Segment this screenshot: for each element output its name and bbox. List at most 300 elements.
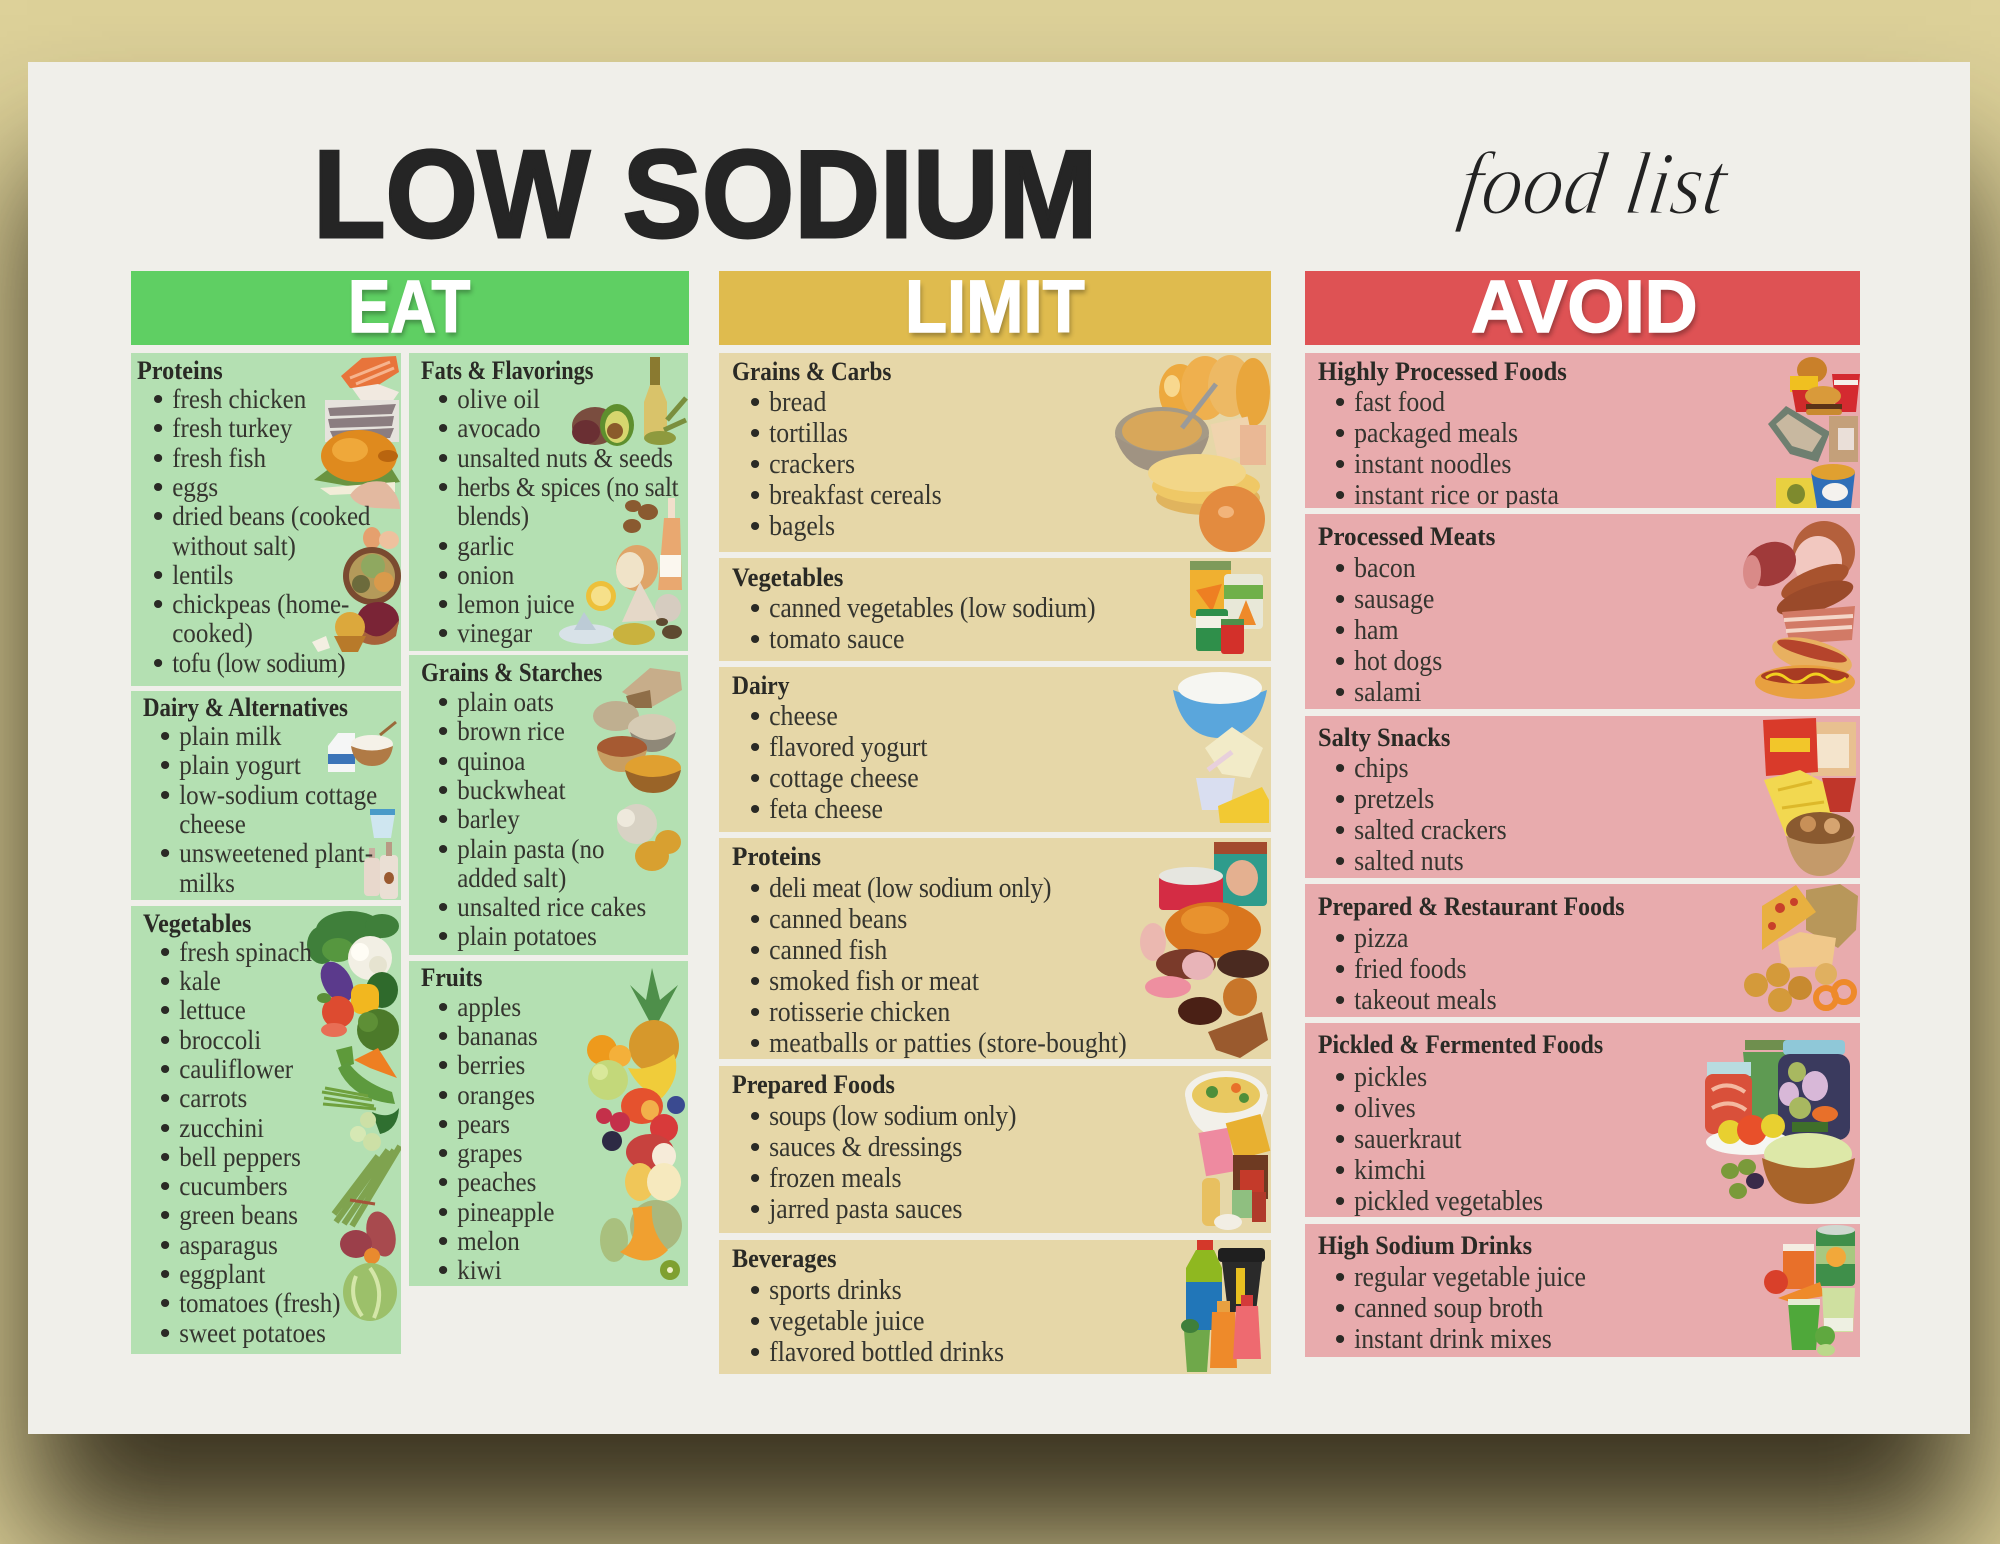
- icon: roast turkey: [314, 430, 400, 495]
- list: vegetables: [161, 936, 340, 1348]
- list: highly processed foods: instant noodles: [1354, 449, 1512, 480]
- icon: pasta bowl: [625, 755, 681, 793]
- icon: meal tray: [1768, 406, 1830, 462]
- icon: bacon: [1782, 606, 1855, 644]
- list: vegetables: tomatoes (fresh): [179, 1287, 340, 1318]
- icon: green jar: [1743, 1040, 1794, 1124]
- list: salty snacks: [1336, 753, 1507, 877]
- food illustrations: proteins: [1140, 842, 1269, 1058]
- icon: crackers: [1210, 416, 1266, 465]
- list: grains: unsalted rice cakes: [457, 891, 646, 922]
- icon: shaker: [1218, 1248, 1265, 1312]
- list: proteins: smoked fish or meat: [769, 966, 978, 996]
- icon: eggs: [363, 527, 399, 549]
- icon: grain sack: [622, 668, 682, 708]
- panel: avoid high sodium drinks: [1305, 1224, 1860, 1357]
- list: vegetables: [751, 592, 1095, 654]
- list: grains and carbs: [751, 387, 941, 542]
- icon: cauliflower: [348, 936, 392, 980]
- icon: eggplant: [314, 956, 360, 1008]
- list: vegetables: canned vegetables (low sodium): [769, 592, 1095, 624]
- food illustrations: grains and carbs: [1115, 355, 1270, 552]
- icon: smoked fish: [1208, 1012, 1268, 1058]
- icon: berries: [596, 1096, 685, 1151]
- list: prepared and restaurant foods: takeout meals: [1354, 985, 1497, 1016]
- icon: cucumber: [1815, 1326, 1835, 1356]
- icon: yellow pepper: [351, 984, 379, 1014]
- icon: cracker bag: [1811, 722, 1856, 776]
- list: fats: olive oil: [457, 383, 540, 414]
- food illustrations: proteins: [312, 356, 401, 652]
- icon: spice bag: [572, 407, 618, 445]
- icon: feta: [1205, 727, 1263, 778]
- list: dairy: cottage cheese: [769, 762, 918, 794]
- list: pickled and fermented foods: sauerkraut: [1354, 1124, 1462, 1154]
- icon: cabbage: [343, 1263, 397, 1321]
- list: high sodium drinks: regular vegetable juice: [1354, 1262, 1586, 1292]
- icon: lentil bowl: [343, 547, 401, 605]
- icon: vinegar bottle: [658, 498, 682, 590]
- icon: bagel: [1199, 486, 1265, 552]
- icon: onion rings: [1816, 982, 1854, 1008]
- icon: salad bowl: [1762, 1133, 1855, 1204]
- icon: pale juice glass: [1822, 1288, 1855, 1332]
- list: fats: vinegar: [457, 617, 532, 648]
- heading: EAT: [131, 271, 689, 345]
- icon: salmon: [341, 356, 399, 402]
- icon: tomato: [1764, 1270, 1788, 1294]
- icon: avocado: [600, 404, 634, 446]
- heading: highly processed foods: Highly Processed Foods: [1318, 356, 1566, 386]
- icon: bread: [1159, 355, 1270, 426]
- subtitle script: food list: [1453, 133, 1733, 233]
- icon: peach: [621, 1088, 663, 1124]
- panel: avoid salty snacks: [1305, 716, 1860, 878]
- list: fats: [439, 383, 678, 648]
- list: fruits: berries: [457, 1049, 525, 1080]
- icon: orange juice glass: [1783, 1244, 1814, 1289]
- panel: limit proteins: [719, 838, 1271, 1059]
- list: proteins: chickpeas (home-: [172, 588, 349, 619]
- heading: AVOID: AVOID: [1471, 265, 1697, 348]
- list: vegetables: eggplant: [179, 1258, 265, 1289]
- icon: nuts: [623, 500, 658, 533]
- icon: asparagus: [334, 1146, 400, 1226]
- icon: potatoes: [635, 830, 681, 871]
- food illustrations: pickled foods: [1705, 1040, 1855, 1204]
- icon: meat patty: [1178, 997, 1222, 1025]
- icon: green juice: [1181, 1319, 1210, 1372]
- heading: beverages: Beverages: [732, 1243, 836, 1273]
- list: fats: avocado: [457, 412, 540, 443]
- icon: hot dog with mustard: [1755, 665, 1855, 699]
- list: fruits: peaches: [457, 1166, 536, 1197]
- panel: avoid prepared and restaurant foods: [1305, 884, 1860, 1017]
- list: vegetables: cauliflower: [179, 1053, 293, 1084]
- icon: yogurt cup: [1196, 752, 1235, 810]
- icon: curry box: [1233, 1155, 1268, 1199]
- list: fruits: [439, 991, 554, 1285]
- food illustrations: fast food: [1768, 357, 1860, 508]
- icon: nuts bowl: [1786, 812, 1855, 876]
- list: fats: lemon juice: [457, 588, 574, 619]
- heading: dairy: Dairy: [732, 670, 789, 700]
- panel: avoid highly processed foods: [1305, 353, 1860, 508]
- food illustrations: dairy: [1173, 672, 1269, 823]
- heading: processed meats: Processed Meats: [1318, 521, 1495, 551]
- list: grains and carbs: tortillas: [769, 418, 847, 449]
- icon: grapes: [588, 1060, 628, 1100]
- icon: sliced roast: [1217, 950, 1269, 978]
- icon: bananas: [628, 1054, 676, 1098]
- icon: oats bowl: [593, 701, 676, 752]
- icon: olives: [1721, 1159, 1764, 1199]
- list: dairy: feta cheese: [769, 794, 882, 824]
- panel: eat proteins: [131, 353, 401, 686]
- icon: takeout bag: [1829, 416, 1858, 462]
- panel: limit prepared foods: [719, 1066, 1271, 1233]
- list: fruits: apples: [457, 991, 521, 1022]
- heading: LIMIT: LIMIT: [905, 265, 1085, 348]
- list: dairy: plain yogurt: [179, 749, 300, 780]
- panel: limit grains and carbs: [719, 353, 1271, 552]
- heading: prepared foods: Prepared Foods: [732, 1069, 894, 1099]
- icon: green beans: [322, 1088, 376, 1109]
- list: fats: blends): [457, 500, 528, 531]
- list: dairy: cheese: [769, 700, 837, 732]
- icon: tuna can: [1159, 867, 1223, 910]
- list: salty snacks: chips: [1354, 753, 1409, 784]
- icon: salami: [1737, 534, 1803, 594]
- icon: tortillas: [1148, 454, 1260, 515]
- heading: prepared and restaurant foods: Prepared & Restaurant Foods: [1318, 891, 1624, 921]
- icon: cheese wedge: [1218, 787, 1269, 823]
- list: grains and carbs: bread: [769, 387, 826, 418]
- icon: chicken leg: [1797, 357, 1827, 383]
- list: salty snacks: salted nuts: [1354, 846, 1464, 877]
- panel: limit beverages: [719, 1240, 1271, 1374]
- icon: yogurt cup: [370, 809, 395, 838]
- panel: avoid pickled and fermented foods: [1305, 1023, 1860, 1217]
- list: vegetables: kale: [179, 965, 220, 996]
- icon: soda cup: [1832, 374, 1860, 412]
- icon: kimchi jar: [1705, 1062, 1752, 1134]
- list: high sodium drinks: instant drink mixes: [1354, 1324, 1552, 1354]
- food illustrations: snacks: [1763, 718, 1856, 876]
- list: prepared foods: sauces & dressings: [769, 1132, 962, 1163]
- list: vegetables: bell peppers: [179, 1141, 300, 1172]
- icon: carrots: [336, 1046, 397, 1078]
- heading: fruits: Fruits: [421, 962, 482, 992]
- icon: kiwi: [660, 1260, 680, 1280]
- list: highly processed foods: [1336, 387, 1559, 508]
- icon: ham roll: [1156, 949, 1216, 980]
- icon: orange bottle: [1210, 1301, 1237, 1368]
- list: proteins: canned beans: [769, 904, 907, 934]
- list: proteins: [154, 383, 370, 678]
- icon: chicken breast: [350, 481, 400, 509]
- icon: pink bottle: [1233, 1295, 1261, 1359]
- icon: instant noodle cup: [1811, 464, 1855, 508]
- list: processed meats: [1336, 553, 1442, 708]
- list: prepared foods: jarred pasta sauces: [769, 1194, 962, 1225]
- icon: tomato: [317, 993, 354, 1037]
- list: grains: added salt): [457, 862, 566, 893]
- icon: garlic: [622, 582, 681, 622]
- heading: grains and carbs: Grains & Carbs: [732, 356, 891, 386]
- list: prepared and restaurant foods: [1336, 923, 1497, 1016]
- icon: instant rice packet: [1776, 478, 1816, 508]
- list: prepared and restaurant foods: pizza: [1354, 923, 1409, 954]
- list: fats: herbs & spices (no salt: [457, 471, 678, 502]
- panel: limit vegetables: [719, 558, 1271, 661]
- list: grains and carbs: breakfast cereals: [769, 480, 941, 511]
- icon: yogurt bowl: [351, 722, 396, 766]
- list: prepared foods: [751, 1101, 1016, 1225]
- heading: LIMIT: [719, 271, 1271, 345]
- list: fruits: kiwi: [457, 1254, 501, 1285]
- list: dairy: [751, 700, 928, 824]
- list: grains: buckwheat: [457, 774, 565, 805]
- food illustrations: processed meats: [1743, 521, 1855, 699]
- list: pickled and fermented foods: olives: [1354, 1092, 1416, 1124]
- icon: lemon slice: [586, 581, 616, 611]
- list: dairy: [161, 720, 377, 898]
- icon: soup bowl: [1185, 1071, 1268, 1138]
- icon: orange: [587, 1035, 631, 1067]
- icon: pizza slice: [1762, 885, 1816, 950]
- panel: eat dairy and alternatives: [131, 691, 401, 900]
- list: highly processed foods: packaged meals: [1354, 418, 1518, 449]
- icon: pineapple: [629, 968, 679, 1072]
- icon: olive oil: [644, 357, 686, 445]
- heading: EAT: EAT: [348, 265, 470, 348]
- list: prepared foods: soups (low sodium only): [769, 1101, 1016, 1132]
- icon: fried nuggets: [1744, 963, 1837, 1012]
- icon: apple: [626, 1134, 676, 1170]
- food illustrations: fats: [559, 357, 688, 645]
- icon: deli slices: [1140, 923, 1166, 961]
- icon: green juice glass: [1788, 1299, 1820, 1350]
- icon: pepper plate: [1706, 1114, 1790, 1155]
- panel: eat vegetables: [131, 906, 401, 1354]
- icon: quinoa bowl: [597, 736, 647, 772]
- list: fats: onion: [457, 559, 514, 590]
- list: fruits: grapes: [457, 1137, 522, 1168]
- list: proteins: deli meat (low sodium only): [769, 872, 1051, 904]
- heading: AVOID: [1305, 271, 1860, 345]
- panel: eat fats and flavorings: [409, 353, 688, 651]
- list: processed meats: sausage: [1354, 584, 1434, 615]
- list: processed meats: hot dogs: [1354, 646, 1442, 677]
- icon: pink bacon: [1145, 976, 1191, 998]
- heading: high sodium drinks: High Sodium Drinks: [1318, 1230, 1532, 1260]
- heading: salty snacks: Salty Snacks: [1318, 722, 1450, 752]
- list: high sodium drinks: canned soup broth: [1354, 1292, 1543, 1324]
- icon: pretzel bag: [1763, 718, 1818, 776]
- list: grains: quinoa: [457, 745, 525, 776]
- icon: fish plate: [325, 400, 399, 442]
- list: vegetables: fresh spinach: [179, 936, 311, 967]
- heading: pickled and fermented foods: Pickled & Fermented Foods: [1318, 1029, 1603, 1059]
- list: grains: [439, 686, 646, 951]
- list: pickled and fermented foods: kimchi: [1354, 1154, 1426, 1186]
- list: proteins: [751, 872, 1126, 1058]
- list: proteins: meatballs or patties (store-bought): [769, 1028, 1126, 1058]
- list: beverages: flavored bottled drinks: [769, 1336, 1004, 1368]
- list: dairy: low-sodium cottage: [179, 779, 377, 810]
- list: beverages: sports drinks: [769, 1274, 901, 1306]
- icon: lemon juicer: [559, 612, 615, 644]
- list: grains: plain potatoes: [457, 920, 596, 951]
- icon: sausages: [1773, 556, 1857, 623]
- list: fruits: pears: [457, 1108, 510, 1139]
- list: pickled and fermented foods: pickles: [1354, 1062, 1427, 1092]
- list: fruits: melon: [457, 1225, 519, 1256]
- list: highly processed foods: fast food: [1354, 387, 1445, 418]
- icon: mixed pickle jar: [1778, 1040, 1850, 1140]
- list: proteins: eggs: [172, 471, 218, 502]
- list: proteins: fresh chicken: [172, 383, 306, 414]
- list: vegetables: sweet potatoes: [179, 1317, 325, 1348]
- list: prepared and restaurant foods: fried foods: [1354, 954, 1467, 985]
- list: fruits: pineapple: [457, 1196, 554, 1227]
- list: proteins: lentils: [172, 559, 233, 590]
- icon: onion: [616, 545, 658, 591]
- icon: bean can: [1214, 842, 1267, 906]
- heading: grains: Grains & Starches: [421, 657, 602, 687]
- list: processed meats: salami: [1354, 677, 1421, 708]
- list: proteins: tofu (low sodium): [172, 647, 345, 678]
- food illustrations: restaurant foods: [1744, 884, 1858, 1012]
- list: proteins: fresh fish: [172, 442, 266, 473]
- heading: vegetables: Vegetables: [732, 562, 843, 592]
- list: proteins: canned fish: [769, 934, 887, 966]
- icon: hot dog: [1768, 630, 1856, 682]
- list: vegetables: zucchini: [179, 1112, 263, 1143]
- list: grains: brown rice: [457, 715, 565, 746]
- list: proteins: rotisserie chicken: [769, 996, 950, 1028]
- title: LOW SODIUM: [313, 126, 1097, 264]
- list: dairy: milks: [179, 867, 234, 898]
- list: vegetables: lettuce: [179, 994, 245, 1025]
- list: fats: unsalted nuts & seeds: [457, 442, 672, 473]
- icon: juice can: [1816, 1225, 1855, 1286]
- list: processed meats: bacon: [1354, 553, 1416, 584]
- icon: fries: [1790, 376, 1818, 412]
- list: beverages: vegetable juice: [769, 1306, 924, 1336]
- icon: peas can: [1196, 609, 1228, 651]
- icon: chicken pieces: [1223, 978, 1257, 1016]
- icon: roast chicken: [1165, 902, 1261, 958]
- list: proteins: without salt): [172, 530, 296, 561]
- heading: proteins: Proteins: [136, 354, 222, 384]
- icon: spinach: [307, 911, 399, 964]
- list: proteins: dried beans (cooked: [172, 500, 370, 531]
- icon: plant milk bottles: [364, 842, 398, 899]
- heading: dairy: Dairy & Alternatives: [143, 692, 348, 722]
- list: fats: garlic: [457, 530, 514, 561]
- list: grains: plain pasta (no: [457, 833, 604, 864]
- icon: paper bag: [1806, 884, 1858, 948]
- list: vegetables: green beans: [179, 1199, 298, 1230]
- list: salty snacks: pretzels: [1354, 784, 1434, 815]
- panel: eat fruits: [409, 961, 688, 1286]
- list: vegetables: cucumbers: [179, 1170, 287, 1201]
- list: grains: plain oats: [457, 686, 553, 717]
- list: proteins: cooked): [172, 617, 253, 648]
- list: vegetables: broccoli: [179, 1024, 261, 1055]
- list: fruits: bananas: [457, 1020, 537, 1051]
- icon: vegetable can: [1224, 574, 1263, 629]
- icon: tomato can: [1221, 619, 1244, 654]
- food illustrations: beverages: [1181, 1240, 1265, 1372]
- food illustrations: drinks: [1764, 1225, 1855, 1356]
- list: proteins: fresh turkey: [172, 412, 292, 443]
- icon: zucchini: [338, 1062, 395, 1104]
- icon: cucumber slices: [350, 1108, 399, 1151]
- icon: chips: [1764, 770, 1838, 836]
- icon: cottage cheese bowl: [1173, 672, 1267, 738]
- icon: red bag corner: [1822, 778, 1856, 812]
- list: dairy: unsweetened plant-: [179, 837, 373, 868]
- list: vegetables: tomato sauce: [769, 624, 904, 654]
- icon: carrot can: [1190, 561, 1231, 618]
- food illustrations: canned vegetables: [1190, 561, 1263, 654]
- icon: burger: [1805, 386, 1842, 415]
- icon: food packets: [1198, 1114, 1270, 1176]
- icon: sweet potato: [340, 1208, 400, 1264]
- list: processed meats: ham: [1354, 615, 1399, 646]
- panel: limit dairy: [719, 667, 1271, 832]
- heading: proteins: Proteins: [732, 841, 821, 871]
- icon: pear: [625, 1163, 681, 1201]
- heading: fats: Fats & Flavorings: [421, 354, 593, 384]
- icon: milk carton: [328, 733, 355, 772]
- list: high sodium drinks: [1336, 1262, 1586, 1354]
- icon: sauce bottles: [1202, 1178, 1266, 1230]
- icon: melon: [600, 1200, 682, 1262]
- list: pickled and fermented foods: pickled vegetables: [1354, 1186, 1543, 1216]
- icon: rice cakes: [617, 804, 657, 844]
- list: prepared foods: frozen meals: [769, 1163, 901, 1194]
- list: grains and carbs: crackers: [769, 449, 855, 480]
- list: vegetables: asparagus: [179, 1229, 277, 1260]
- food illustrations: vegetables: [307, 911, 401, 1321]
- icon: chickpeas and beans: [312, 602, 399, 652]
- icon: seeds: [613, 618, 682, 645]
- list: grains and carbs: bagels: [769, 511, 834, 542]
- list: dairy: cheese: [179, 808, 245, 839]
- heading: vegetables: Vegetables: [143, 908, 251, 938]
- list: fruits: oranges: [457, 1079, 535, 1110]
- panel: eat grains and starches: [409, 655, 688, 955]
- food illustrations: prepared foods: [1185, 1071, 1270, 1230]
- icon: takeout box: [1778, 932, 1836, 968]
- food illustrations: dairy: [328, 721, 398, 899]
- icon: carrots: [1778, 1282, 1824, 1302]
- panel: avoid processed meats: [1305, 514, 1860, 709]
- food illustrations: grains: [593, 668, 682, 871]
- food illustrations: fruits: [587, 968, 685, 1280]
- list: dairy: plain milk: [179, 720, 281, 751]
- list: grains: barley: [457, 803, 519, 834]
- icon: sports drink: [1186, 1240, 1222, 1330]
- icon: ham: [1793, 521, 1855, 588]
- icon: dark greens: [366, 972, 398, 1008]
- icon: broccoli: [357, 1009, 399, 1051]
- list: dairy: flavored yogurt: [769, 732, 927, 762]
